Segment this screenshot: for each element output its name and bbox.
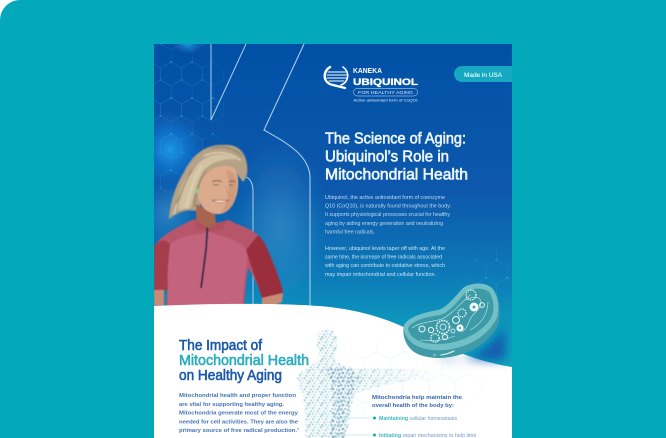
list heading: overall health of the body by: (372, 403, 454, 409)
section heading: on Healthy Aging (179, 368, 282, 384)
logo wordmark: KANEKA (353, 68, 382, 75)
blue hero panel (154, 44, 512, 366)
intro paragraph one: It supports physiological processes crucial for healthy (325, 212, 450, 218)
main title: Ubiquinol’s Role in (325, 148, 449, 166)
document page (130, 34, 512, 438)
hair back (169, 145, 247, 219)
logo tagline pill: FOR HEALTHY AGING (358, 90, 414, 95)
section body text: Mitochondrial health and proper function (179, 393, 297, 399)
intro paragraph two: with aging can contribute to oxidative stress, which (324, 263, 445, 269)
made in USA badge (454, 66, 512, 82)
list heading: Mitochondria help maintain the (372, 395, 463, 401)
logo (325, 67, 418, 102)
jacket (154, 219, 283, 306)
intro paragraph one: aging by aiding energy generation and neutralizing (325, 221, 443, 227)
hexagon network top left (154, 44, 224, 194)
intro paragraph one: Q10 (CoQ10), is naturally found throughout the body. (325, 204, 451, 210)
photo: runner woman (154, 145, 283, 306)
logo caption: Active antioxidant form of CoQ10 (354, 98, 418, 102)
logo icon: DNA helix (325, 67, 348, 88)
intro paragraph one (325, 195, 451, 235)
section heading (179, 338, 309, 384)
logo: UBIQUINOL (353, 77, 418, 88)
mitochondrion illustration (403, 283, 505, 360)
intro paragraph one: Ubiquinol, the active antioxidant form of coenzyme (325, 195, 445, 201)
main title: Mitochondrial Health (325, 166, 468, 184)
list heading (372, 395, 463, 409)
main title (325, 130, 468, 184)
made in USA badge: Made in USA (464, 72, 503, 79)
benefits list (335, 395, 477, 438)
intro paragraph two: may impair mitochondrial and cellular function. (325, 272, 436, 278)
section body text (179, 393, 299, 434)
section body text: Mitochondria generate most of the energy (179, 411, 299, 417)
white lower panel (154, 304, 512, 438)
thin white bottle outlines (211, 44, 310, 306)
section body text: are vital for supporting healthy aging. (179, 402, 284, 408)
intro paragraph two (324, 246, 445, 278)
section body text: primary source of free radical production.¹ (179, 427, 299, 434)
bullet: maintaining: Maintaining cellular homeostasis (379, 416, 457, 422)
section body text: needed for cell activities. They are also the (179, 419, 298, 425)
section heading: The Impact of (179, 338, 263, 354)
intro paragraph two: However, ubiquinol levels taper off with age. At the (325, 246, 445, 252)
hexagon network right (465, 242, 512, 316)
face and neck (195, 166, 238, 228)
section heading: Mitochondrial Health (179, 353, 309, 369)
intro paragraph one: harmful free radicals. (325, 229, 375, 235)
main title: The Science of Aging: (325, 130, 466, 148)
intro paragraph two: same time, the increase of free radicals associated (325, 255, 442, 261)
bullet: maintaining (335, 416, 457, 421)
bullet: initiating (335, 433, 477, 438)
dotted human figure (296, 328, 432, 438)
